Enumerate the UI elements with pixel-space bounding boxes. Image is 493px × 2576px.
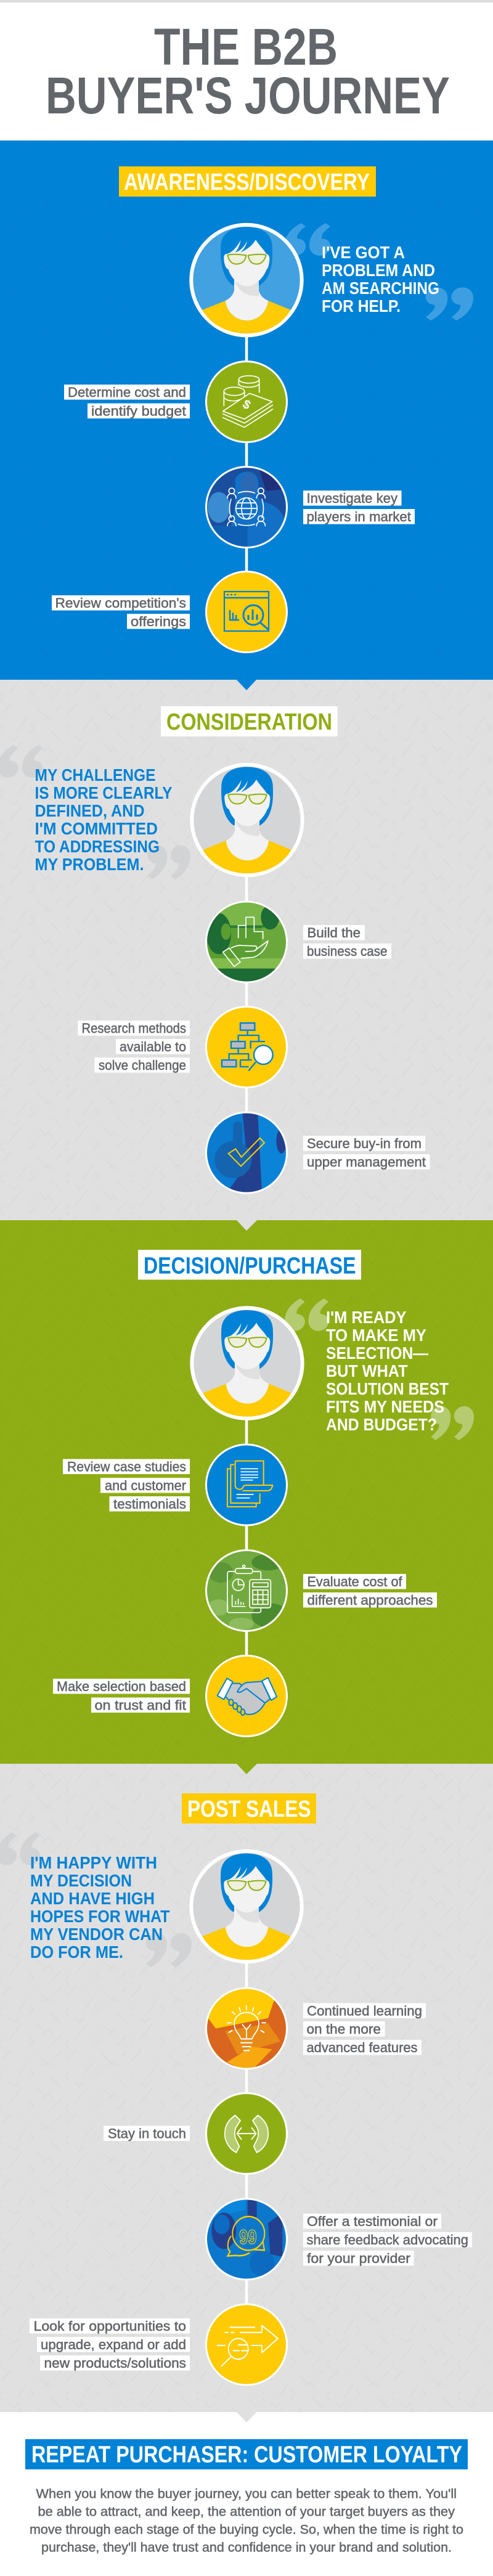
label: look for opportunities: new products/solutions: [44, 2355, 186, 2371]
quote text: DO FOR ME.: [30, 1942, 123, 1962]
label: offer a testimonial: [303, 2214, 472, 2266]
panel: awareness background: [0, 141, 493, 680]
icon: photo with light bulb: [205, 1987, 288, 2069]
quote text: I'M HAPPY WITH: [30, 1853, 157, 1872]
icon: photo with globe and people: [205, 466, 288, 548]
icon: photo with speech bubbles: [205, 2198, 288, 2280]
label: look for opportunities: [30, 2318, 190, 2371]
icon: coins and bills: [206, 361, 287, 442]
avatar: buyer consideration: [192, 765, 303, 875]
label: investigate key players: Investigate key: [307, 491, 397, 506]
label: review case studies: Review case studies: [67, 1459, 186, 1474]
top strip: [0, 0, 493, 2]
quote text: [30, 1853, 170, 1962]
icon: opening quote: [0, 745, 43, 778]
arrow: post sales to loyalty: [237, 2412, 256, 2423]
quote text: [322, 243, 439, 316]
arrow: decision to post sales: [237, 1764, 257, 1774]
quote text: [35, 765, 173, 874]
quote text: MY CHALLENGE: [35, 765, 155, 785]
title: THE B2B: [154, 18, 338, 76]
label: continued learning: on the more: [307, 2021, 381, 2037]
label: make selection: Make selection based: [57, 1679, 186, 1694]
icon: photo with clipboard and calculator: [205, 1549, 288, 1632]
section: decision: [53, 1250, 474, 1737]
closing paragraph: [30, 2486, 463, 2555]
icon: closing quote: [146, 1933, 192, 1967]
icon: documents: [206, 1445, 287, 1525]
quote text: TO ADDRESSING: [35, 837, 160, 856]
label: research methods: available to: [120, 1039, 186, 1054]
label: look for opportunities: Look for opportunities to: [33, 2318, 186, 2334]
icon: handshake: [206, 1655, 287, 1737]
label: offer a testimonial: for your provider: [307, 2251, 410, 2266]
closing paragraph: be able to attract, and keep, the attention of your target buyers as they: [38, 2505, 455, 2519]
label: determine cost: [64, 385, 190, 419]
label: review competition: Review competition's: [55, 595, 186, 611]
label: review case studies: [63, 1459, 190, 1512]
label: build business case: Build the: [307, 925, 361, 940]
icon: window with magnifier: [206, 572, 287, 652]
label: investigate key players: players in market: [307, 509, 411, 524]
label: secure buy-in: [303, 1136, 430, 1170]
label: continued learning: Continued learning: [307, 2003, 422, 2019]
icon: flowchart with magnifier: [206, 1007, 287, 1087]
icon: phones with arrow: [206, 2093, 287, 2174]
label: review case studies: testimonials: [113, 1496, 186, 1512]
quote text: I'M READY: [326, 1308, 407, 1327]
label: evaluate cost: Evaluate cost of: [307, 1574, 402, 1589]
quote text: AND BUDGET?: [326, 1415, 437, 1434]
section: post sales: [0, 1793, 472, 2385]
label: research methods: Research methods: [81, 1021, 186, 1036]
quote text: MY PROBLEM.: [35, 855, 144, 874]
icon: closing quote: [147, 846, 190, 879]
label: evaluate cost: different approaches: [307, 1592, 433, 1608]
quote text: SELECTION—: [326, 1343, 428, 1363]
label: review competition: offerings: [131, 614, 186, 629]
label: research methods: [78, 1021, 190, 1073]
quote text: HOPES FOR WHAT: [30, 1907, 170, 1926]
icon: closing quote: [431, 1406, 474, 1440]
quote text: FOR HELP.: [322, 296, 401, 316]
label: review case studies: and customer: [105, 1478, 186, 1493]
closing paragraph: When you know the buyer journey, you can better speak to them. You'll: [36, 2486, 457, 2501]
panel: post sales background: [0, 1764, 493, 2412]
label: make selection: [53, 1679, 190, 1713]
icon: arrow with magnifier: [206, 2304, 287, 2385]
heading: consideration: CONSIDERATION: [166, 709, 332, 735]
quote text: MY VENDOR CAN: [30, 1925, 163, 1944]
label: determine cost: identify budget: [91, 403, 186, 419]
title: [46, 18, 450, 124]
panel: decision background: [0, 1220, 493, 1764]
icon: opening quote: [285, 223, 330, 256]
section: awareness: [52, 166, 473, 652]
quote text: MY DECISION: [30, 1871, 132, 1890]
icon: opening quote: [285, 1298, 328, 1331]
quote text: IS MORE CLEARLY: [35, 783, 173, 802]
label: research methods: solve challenge: [99, 1058, 186, 1073]
quote text: I'M COMMITTED: [35, 819, 158, 838]
label: look for opportunities: upgrade, expand or add: [41, 2337, 186, 2352]
label: investigate key players: [303, 491, 415, 524]
label: evaluate cost: [303, 1574, 437, 1608]
label: stay in touch: Stay in touch: [108, 2126, 186, 2141]
quote text: SOLUTION BEST: [326, 1379, 449, 1398]
panel: consideration background: [0, 680, 493, 1220]
heading: decision/purchase: DECISION/PURCHASE: [144, 1253, 356, 1279]
label: review competition: [52, 595, 190, 629]
label: continued learning: advanced features: [307, 2040, 418, 2055]
label: offer a testimonial: Offer a testimonial or: [307, 2214, 438, 2229]
quote text: I'VE GOT A: [322, 243, 405, 262]
quote text: FITS MY NEEDS: [326, 1397, 444, 1416]
quote text: BUT WHAT: [326, 1361, 408, 1380]
quote text: PROBLEM AND: [322, 261, 435, 280]
label: determine cost: Determine cost and: [68, 385, 186, 400]
label: build business case: business case: [307, 944, 387, 959]
arrow: awareness to consideration: [237, 680, 256, 690]
label: continued learning: [303, 2003, 426, 2055]
icon: photo with hand and bars: [205, 901, 288, 984]
arrow: consideration to decision: [237, 1220, 257, 1231]
label: make selection: on trust and fit: [95, 1697, 186, 1713]
icon: opening quote: [0, 1832, 40, 1865]
quote text: AM SEARCHING: [322, 279, 439, 298]
avatar: buyer decision: [192, 1308, 303, 1419]
icon: closing quote: [426, 287, 473, 320]
icon: coins and bills: $: [240, 397, 253, 412]
section: consideration: [0, 706, 430, 1197]
quote text: TO MAKE MY: [326, 1326, 426, 1345]
closing paragraph: purchase, they'll have trust and confidence in your brand and solution.: [41, 2540, 452, 2555]
icon: photo with check mark: [205, 1112, 288, 1194]
label: build business case: [303, 925, 391, 959]
closing paragraph: move through each stage of the buying cycle. So, when the time is right to: [30, 2522, 463, 2537]
avatar: buyer post sales: [191, 1851, 302, 1962]
label: secure buy-in: Secure buy-in from: [307, 1136, 422, 1151]
timeline connectors: [245, 336, 248, 2313]
heading: post sales: POST SALES: [187, 1796, 311, 1822]
heading: awareness/discovery: AWARENESS/DISCOVERY: [124, 169, 370, 195]
section: repeat purchaser: [25, 2439, 468, 2555]
label: secure buy-in: upper management: [307, 1154, 426, 1170]
quote text: [326, 1308, 449, 1434]
icon: photo with speech bubbles: 99: [239, 2227, 256, 2249]
avatar: buyer awareness: [191, 225, 302, 335]
quote text: DEFINED, AND: [35, 801, 144, 820]
quote text: AND HAVE HIGH: [30, 1889, 155, 1908]
label: offer a testimonial: share feedback advocating: [307, 2232, 468, 2248]
